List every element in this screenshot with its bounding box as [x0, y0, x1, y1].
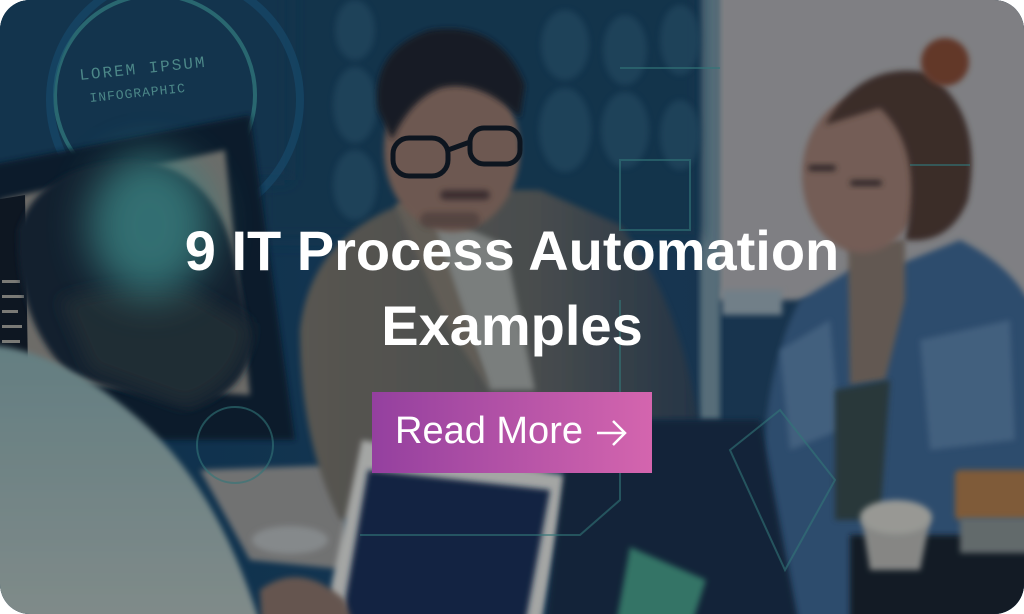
background photo: three colleagues in a meeting with tech overlay: INFOGRAPHIC [89, 81, 187, 106]
button: read more [372, 392, 652, 473]
center man head [384, 68, 520, 232]
woman head [802, 97, 922, 253]
glasses [393, 128, 520, 176]
left monitor and glow [0, 0, 290, 180]
table [200, 465, 350, 570]
title: Examples [381, 294, 643, 357]
teal glow [88, 153, 212, 297]
title [185, 219, 839, 357]
title: 9 IT Process Automation [185, 219, 839, 282]
neck and top [848, 240, 905, 385]
left person head [18, 160, 252, 410]
wall right [716, 0, 1024, 300]
laptops and cup [322, 440, 568, 614]
man features [420, 190, 490, 228]
tech overlay lines [197, 68, 970, 570]
woman jacket [762, 240, 1024, 614]
dark central backdrop [260, 0, 700, 240]
center man jacket [300, 190, 698, 520]
left person shirt [0, 345, 262, 614]
background photo: three colleagues in a meeting with tech overlay: LOREM IPSUM [79, 54, 207, 85]
button: read more: Read More [395, 410, 583, 452]
